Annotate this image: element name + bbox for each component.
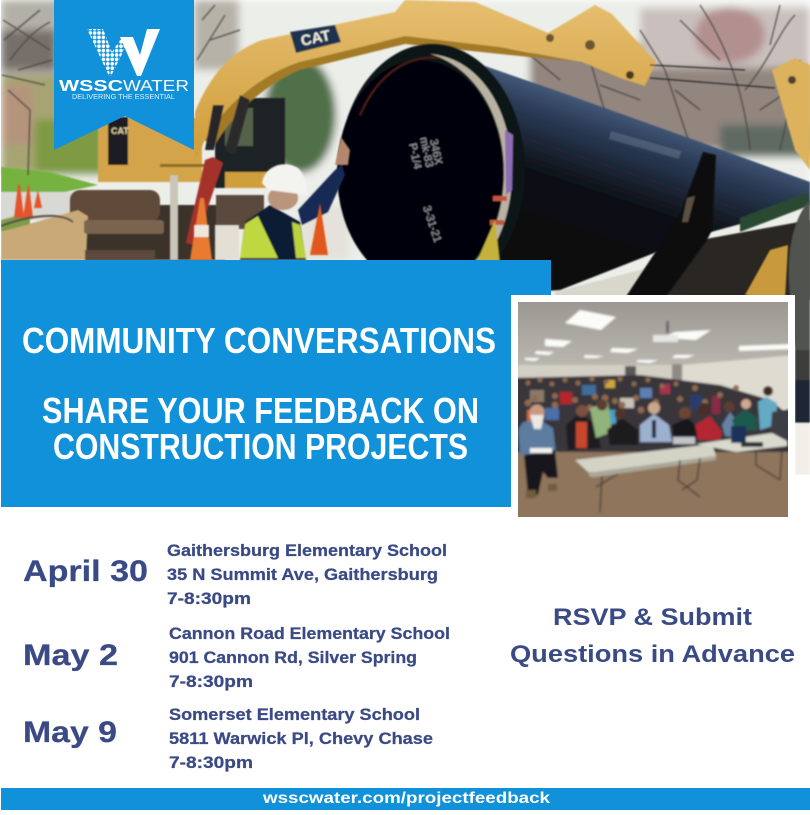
- heading: community conversations: COMMUNITY CONVERSATIONS: [22, 320, 496, 361]
- ceiling: [518, 302, 788, 366]
- venue details: Cannon Road: 901 Cannon Rd, Silver Spring: [169, 649, 417, 667]
- hero photo: pipe installation at construction site: [1, 0, 810, 475]
- heading: construction projects: CONSTRUCTION PROJECTS: [53, 426, 468, 467]
- venue details: Gaithersburg: [167, 542, 447, 608]
- large black pipe: P-1/4: [406, 142, 423, 170]
- footer URL bar: [1, 788, 810, 810]
- traffic cones: [14, 185, 328, 260]
- excavator body: CAT: [111, 126, 129, 136]
- logo banner: [54, 0, 194, 150]
- event: April 30: [23, 542, 447, 608]
- venue details: Cannon Road: Cannon Road Elementary School: [169, 625, 450, 643]
- dark undercarriage below pipe: [555, 220, 810, 300]
- large black pipe: mk-83: [417, 136, 435, 169]
- logo tagline: DELIVERING THE ESSENTIAL: [72, 94, 175, 101]
- event: May 9: [23, 706, 433, 772]
- WSSC W mark: [87, 29, 160, 76]
- ceiling lights: [525, 310, 795, 363]
- venue details: Somerset: 7-8:30pm: [169, 754, 253, 772]
- RSVP call to action: Questions in Advance: [510, 641, 795, 668]
- seated attendees in front row: [518, 386, 795, 498]
- venue details: Gaithersburg: Gaithersburg Elementary School: [167, 542, 447, 560]
- venue details: Cannon Road: 7-8:30pm: [169, 673, 253, 691]
- large black pipe: 346X: [427, 138, 444, 166]
- venue details: Somerset: [169, 706, 433, 772]
- worker in hard hat and safety vest: [240, 137, 350, 260]
- date: May 9: May 9: [23, 716, 117, 749]
- bare tree branches: [2, 5, 800, 175]
- date: May 2: May 2: [23, 639, 118, 672]
- venue details: Gaithersburg: 35 N Summit Ave, Gaithersburg: [167, 566, 438, 584]
- excavator boom with CAT logo: [195, 0, 810, 170]
- heading: share your feedback: SHARE YOUR FEEDBACK ON: [42, 390, 479, 431]
- venue details: Cannon Road: [169, 625, 450, 691]
- banner shape: [54, 0, 194, 150]
- crowd: [510, 375, 795, 452]
- logo wordmark: WSSC: [59, 78, 123, 95]
- community meeting photo with white frame: [510, 295, 800, 525]
- venue details: Gaithersburg: 7-8:30pm: [167, 590, 251, 608]
- back wall: [518, 364, 684, 380]
- venue details: Somerset: Somerset Elementary School: [169, 706, 420, 724]
- projector: [653, 321, 678, 342]
- event: May 2: [23, 625, 450, 691]
- pipe support bracket: [625, 152, 810, 475]
- folding tables with projector and laptop: [575, 426, 787, 512]
- blue title panel: [1, 260, 551, 507]
- logo banner: WATER: [123, 78, 189, 95]
- carpet: [518, 450, 788, 517]
- wooden trench box and pipes: [1, 175, 239, 260]
- venue details: Somerset: 5811 Warwick Pl, Chevy Chase: [169, 730, 433, 748]
- grass and road: [1, 167, 98, 232]
- date: April 30: April 30: [23, 555, 148, 588]
- large black pipe: 3-31-21: [420, 204, 443, 244]
- large black pipe: [337, 44, 810, 296]
- RSVP call to action: [510, 604, 795, 668]
- sky and trees background: [1, 0, 810, 300]
- excavator boom with CAT logo: CAT: [299, 27, 332, 50]
- RSVP call to action: RSVP & Submit: [553, 604, 752, 631]
- excavator body: [70, 98, 285, 260]
- footer URL bar: wsscwater.com/projectfeedback: [262, 790, 550, 807]
